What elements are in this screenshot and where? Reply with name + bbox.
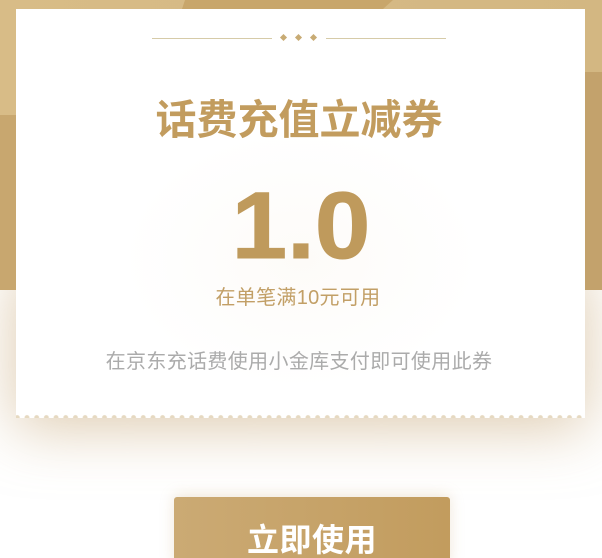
coupon card xyxy=(16,9,585,418)
button xyxy=(174,497,450,558)
scalloped bottom edge xyxy=(16,414,585,418)
amount: 1.0 xyxy=(232,173,370,279)
button label: 立即使用 xyxy=(247,522,377,558)
usage note: 在京东充话费使用小金库支付即可使用此券 xyxy=(106,351,492,373)
title: 话费充值立减券 xyxy=(156,97,442,143)
usage condition: 在单笔满10元可用 xyxy=(216,287,380,309)
ornamental divider xyxy=(152,34,446,41)
card shadow xyxy=(0,290,602,464)
diamonds xyxy=(280,34,287,41)
gold header background xyxy=(0,0,602,290)
soft centre tint xyxy=(121,129,481,389)
